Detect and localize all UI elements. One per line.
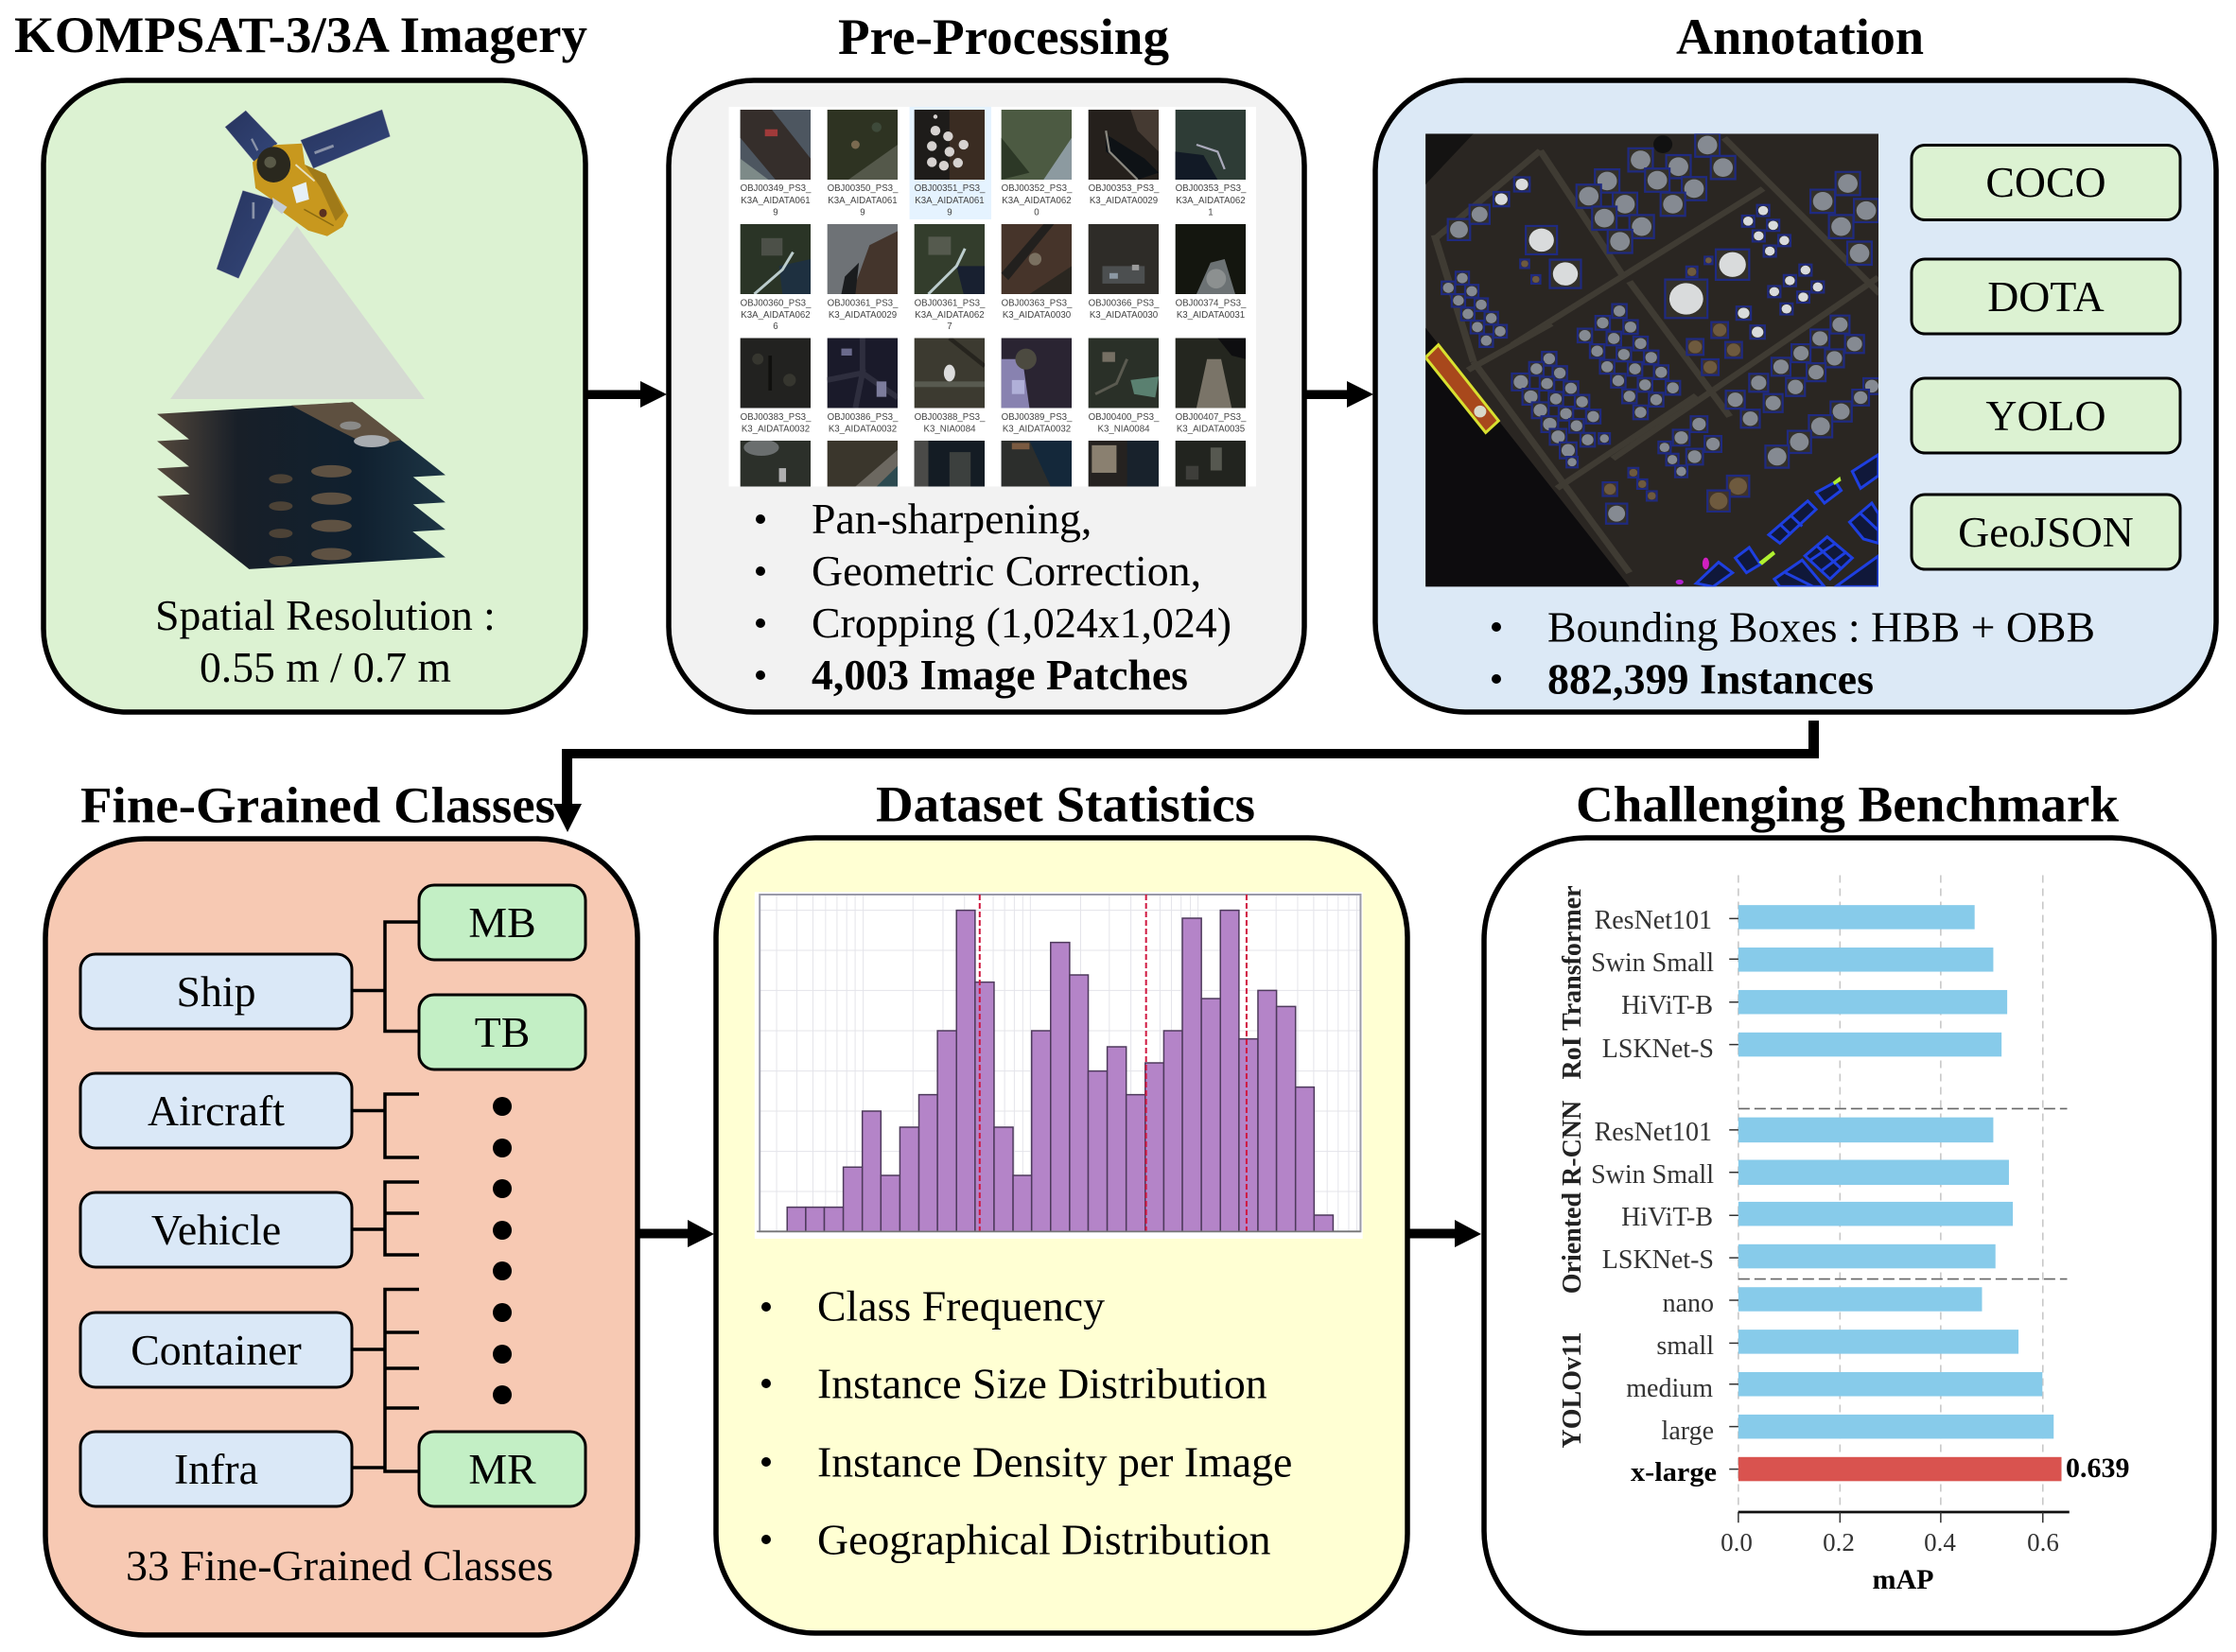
panel: dataset statistics: [716, 838, 1407, 1633]
arrow: classes to statistics: [638, 1220, 714, 1247]
arrow: imagery to pre-processing: [585, 381, 667, 408]
panel: annotation: [1375, 80, 2216, 712]
format button: YOLO: [1912, 378, 2180, 453]
model labels: HiViT-B: [1621, 1203, 1713, 1232]
model labels: Swin Small: [1591, 948, 1714, 978]
thumbnail captions: OBJ00351_PS3_: [915, 183, 986, 194]
thumbnail captions: OBJ00353_PS3_: [1089, 183, 1160, 194]
thumbnail captions: OBJ00363_PS3_: [1002, 299, 1073, 308]
thumbnail captions: K3_AIDATA0032: [1003, 424, 1071, 435]
category: Infra: [80, 1432, 352, 1506]
subclass: TB: TB: [475, 1008, 530, 1056]
heading: Pre-Processing: Pre-Processing: [838, 9, 1169, 65]
bar chart: mAP by model: [1558, 876, 2130, 1595]
thumbnail captions: 7: [947, 322, 952, 332]
thumbnail captions: OBJ00386_PS3_: [828, 412, 899, 423]
thumbnail captions: 9: [947, 208, 952, 217]
bullet list: pre-processing steps: Pan-sharpening,: [812, 495, 1092, 543]
bullet list: pre-processing steps: Cropping (1,024x1,024): [812, 599, 1232, 647]
category: Vehicle: Vehicle: [151, 1206, 281, 1254]
text: spatial resolution: 0.55 m / 0.7 m: [200, 643, 451, 691]
thumbnail captions: [741, 183, 1247, 435]
heading: KOMPSAT-3/3A Imagery: KOMPSAT-3/3A Imagery: [14, 7, 587, 63]
thumbnail captions: OBJ00389_PS3_: [1002, 412, 1073, 423]
bullet list: pre-processing steps: 4,003 Image Patches: [812, 651, 1188, 699]
thumbnail captions: K3A_AIDATA062: [1002, 196, 1072, 206]
thumbnail captions: OBJ00352_PS3_: [1002, 183, 1073, 194]
format button: GeoJSON: [1912, 495, 2180, 569]
model labels: Swin Small: [1591, 1160, 1714, 1190]
text: spatial resolution: Spatial Resolution :: [155, 591, 496, 639]
category: Aircraft: [80, 1073, 352, 1148]
thumbnail captions: OBJ00349_PS3_: [741, 183, 812, 194]
thumbnail captions: OBJ00374_PS3_: [1176, 299, 1247, 308]
connector tree: [352, 922, 419, 1471]
thumbnail captions: K3_AIDATA0031: [1177, 310, 1245, 321]
panel: fine-grained classes: [45, 839, 638, 1635]
bullet list: annotation facts: Bounding Boxes : HBB + OBB: [1547, 603, 2095, 651]
category: Vehicle: [80, 1192, 352, 1267]
heading: Challenging Benchmark: Challenging Benchmark: [1576, 775, 2119, 832]
image: patch thumbnail browser: [728, 107, 1256, 486]
thumbnail captions: 1: [1208, 208, 1214, 217]
thumbnail captions: K3A_AIDATA061: [828, 196, 898, 206]
thumbnail captions: OBJ00407_PS3_: [1176, 412, 1247, 423]
category: Ship: Ship: [176, 967, 255, 1016]
bullet list: pre-processing steps: Geometric Correction,: [812, 547, 1201, 595]
format button: YOLO: YOLO: [1985, 391, 2106, 440]
bullet list: pre-processing steps: [756, 495, 1232, 699]
text: spatial resolution: [155, 591, 496, 691]
subclass: MR: [419, 1432, 585, 1506]
thumbnail captions: 9: [773, 208, 778, 217]
histogram chart: [755, 892, 1363, 1239]
arrow: annotation to fine-grained classes: [553, 721, 1819, 832]
thumbnail captions: OBJ00388_PS3_: [915, 412, 986, 423]
category: Ship: [80, 954, 352, 1029]
image: stacked satellite scenes: [157, 402, 445, 569]
arrow: statistics to benchmark: [1409, 1220, 1481, 1247]
subclass: MB: MB: [468, 898, 536, 947]
axis tick labels: 0.4: [1924, 1528, 1956, 1556]
icon: sensor footprint triangle: [170, 226, 425, 399]
subclass: TB: [419, 995, 585, 1069]
model labels: small: [1656, 1331, 1714, 1361]
thumbnail captions: 0: [1034, 208, 1039, 217]
category: Infra: Infra: [174, 1445, 258, 1493]
value label: 0.639: 0.639: [2066, 1452, 2130, 1484]
format button: GeoJSON: GeoJSON: [1958, 508, 2134, 556]
axis tick labels: [1721, 1528, 2059, 1556]
model labels: nano: [1663, 1289, 1714, 1318]
axis tick labels: 0.2: [1823, 1528, 1855, 1556]
thumbnail captions: OBJ00400_PS3_: [1089, 412, 1160, 423]
thumbnail captions: K3_AIDATA0032: [742, 424, 810, 435]
thumbnail captions: K3A_AIDATA062: [915, 310, 985, 321]
heading: Annotation: Annotation: [1676, 9, 1924, 65]
category: Container: [80, 1313, 352, 1387]
heading: Dataset Statistics: Dataset Statistics: [876, 775, 1255, 832]
caption: 33 fine-grained classes: 33 Fine-Grained Classes: [126, 1541, 553, 1590]
model labels: HiViT-B: [1621, 991, 1713, 1020]
model labels: LSKNet-S: [1602, 1035, 1714, 1064]
thumbnail captions: OBJ00361_PS3_: [915, 299, 986, 308]
axis tick labels: 0.0: [1721, 1528, 1753, 1556]
format button: DOTA: DOTA: [1987, 272, 2105, 321]
bullet list: statistics: [761, 1282, 1292, 1564]
group labels: RoI Transformer: [1558, 885, 1587, 1080]
bullet list: annotation facts: 882,399 Instances: [1547, 654, 1874, 704]
thumbnail captions: OBJ00353_PS3_: [1176, 183, 1247, 194]
thumbnail captions: K3_NIA0084: [924, 424, 976, 435]
axis tick labels: 0.6: [2027, 1528, 2059, 1556]
thumbnail captions: OBJ00383_PS3_: [741, 412, 812, 423]
format button: COCO: [1912, 146, 2180, 219]
annotation boxes: vehicles and buildings: [1696, 455, 1878, 586]
ellipsis dots: [493, 1097, 512, 1404]
thumbnail captions: 9: [860, 208, 865, 217]
thumbnail captions: K3A_AIDATA061: [741, 196, 811, 206]
tanks: [1441, 133, 1880, 524]
panel: challenging benchmark: [1484, 838, 2214, 1633]
group labels: Oriented R-CNN: [1558, 1101, 1587, 1294]
model labels: LSKNet-S: [1602, 1245, 1714, 1275]
thumbnail captions: 6: [773, 322, 778, 332]
bullet list: annotation facts: [1492, 603, 2095, 704]
group labels: [1558, 885, 1587, 1448]
thumbnail captions: K3_AIDATA0029: [1090, 196, 1158, 206]
model labels: ResNet101: [1595, 906, 1712, 935]
bullet list: statistics: Instance Size Distribution: [817, 1360, 1267, 1407]
bullet list: statistics: Class Frequency: [817, 1282, 1105, 1330]
thumbnail captions: K3A_AIDATA062: [741, 310, 811, 321]
panel: pre-processing: [669, 80, 1304, 712]
icon: satellite: [217, 110, 390, 278]
model labels: [1591, 906, 1717, 1487]
axis title: mAP: mAP: [1873, 1564, 1933, 1595]
heading: Fine-Grained Classes: Fine-Grained Classes: [80, 777, 555, 834]
model labels: large: [1662, 1417, 1714, 1446]
thumbnail captions: K3_AIDATA0035: [1177, 424, 1245, 435]
subclass: MR: MR: [468, 1445, 536, 1493]
category: Container: Container: [131, 1326, 302, 1374]
thumbnail captions: K3_AIDATA0030: [1003, 310, 1072, 321]
format button: DOTA: [1912, 259, 2180, 334]
thumbnail captions: OBJ00366_PS3_: [1089, 299, 1160, 308]
subclass: MB: [419, 885, 585, 960]
arrow: pre-processing to annotation: [1304, 381, 1373, 408]
model labels: x-large: [1631, 1458, 1717, 1487]
model labels: ResNet101: [1595, 1118, 1712, 1147]
thumbnail captions: OBJ00360_PS3_: [741, 299, 812, 308]
panel: KOMPSAT imagery: [44, 80, 585, 712]
group labels: YOLOv11: [1558, 1332, 1587, 1448]
thumbnail captions: K3_AIDATA0029: [829, 310, 897, 321]
thumbnail captions: K3A_AIDATA061: [915, 196, 985, 206]
category: Aircraft: Aircraft: [148, 1087, 285, 1135]
bullet list: statistics: Instance Density per Image: [817, 1437, 1292, 1487]
thumbnail captions: K3_NIA0084: [1098, 424, 1150, 435]
image: annotated oil tank aerial view: [1425, 133, 1880, 586]
thumbnail captions: K3_AIDATA0032: [829, 424, 897, 435]
thumbnail captions: OBJ00361_PS3_: [828, 299, 899, 308]
format button: COCO: COCO: [1985, 158, 2106, 206]
bullet list: statistics: Geographical Distribution: [817, 1515, 1271, 1564]
model labels: medium: [1626, 1374, 1713, 1403]
thumbnail captions: K3A_AIDATA062: [1176, 196, 1246, 206]
thumbnail captions: OBJ00350_PS3_: [828, 183, 899, 194]
thumbnail captions: K3_AIDATA0030: [1090, 310, 1159, 321]
